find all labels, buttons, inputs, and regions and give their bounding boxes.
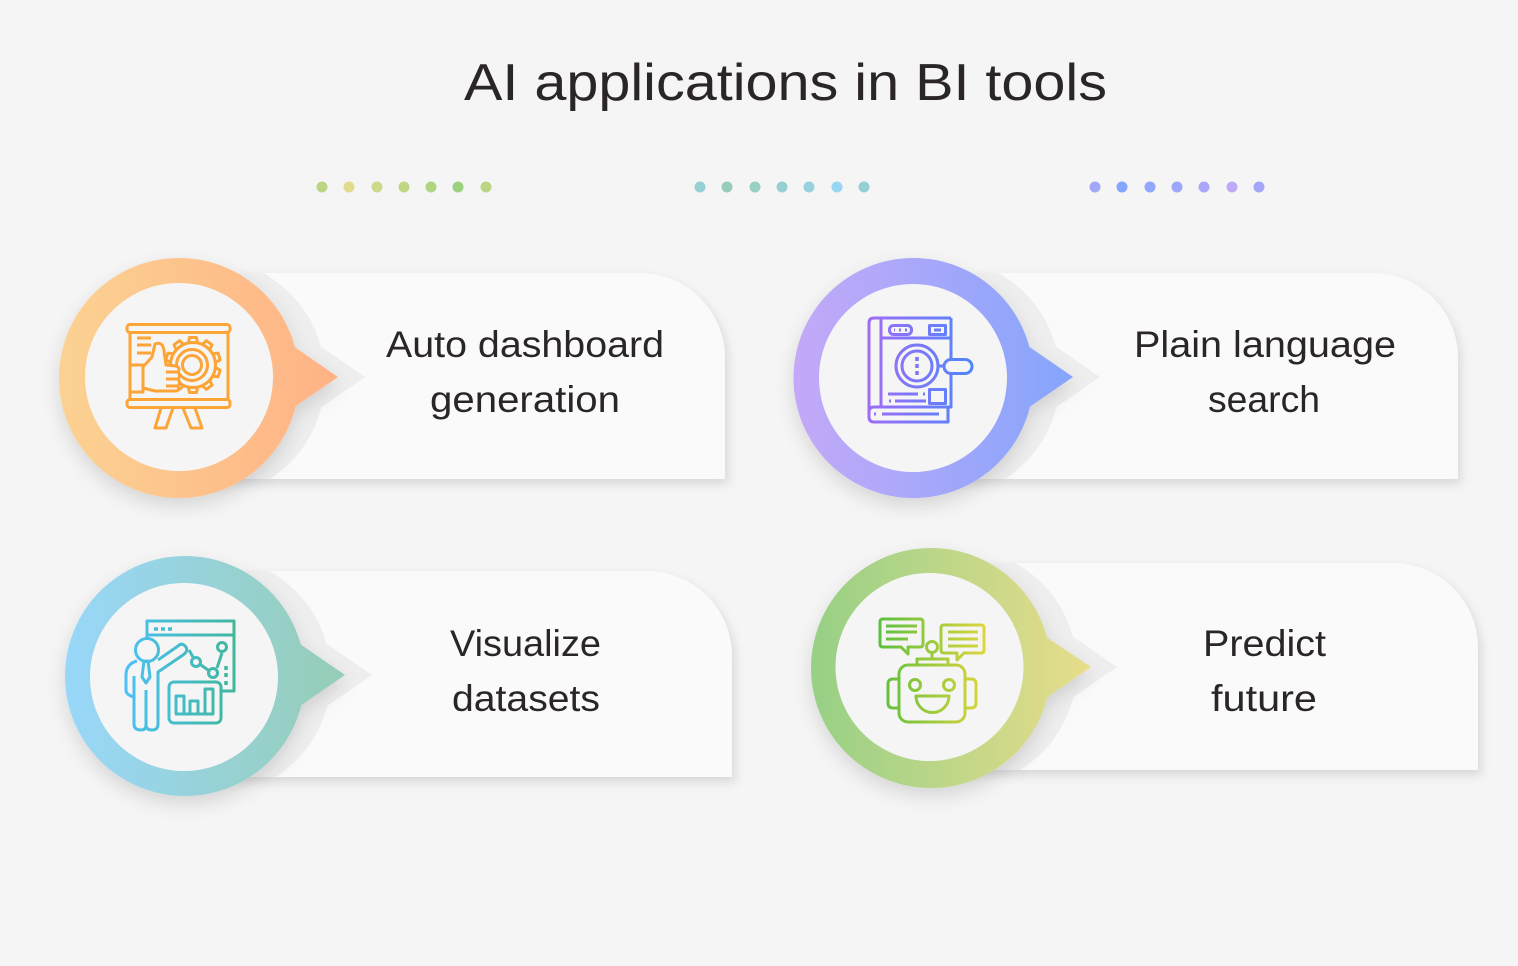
dotted divider: teal <box>694 182 870 192</box>
label <box>386 324 664 420</box>
pin badge <box>65 556 345 796</box>
infographic canvas <box>54 62 1484 810</box>
badge centre <box>819 284 1007 472</box>
pin badge <box>811 548 1091 788</box>
label: Predict <box>1203 623 1327 664</box>
card background <box>935 273 1458 479</box>
panel: predict future <box>811 548 1478 788</box>
icon: chatbot with speech bubbles <box>880 619 984 722</box>
label: datasets <box>452 678 600 719</box>
label: Visualize <box>450 623 601 664</box>
icon: presentation board with thumbs-up and gear <box>127 324 230 428</box>
label: Auto dashboard <box>386 324 664 365</box>
card background <box>205 571 732 777</box>
badge centre <box>85 283 273 471</box>
panel: auto dashboard generation <box>59 258 725 498</box>
label: search <box>1208 379 1320 420</box>
label <box>1134 324 1396 420</box>
label: generation <box>430 379 620 420</box>
card inner shade <box>244 571 372 777</box>
label <box>450 623 601 719</box>
label <box>1203 623 1327 719</box>
badge centre <box>90 583 278 771</box>
card background <box>950 563 1478 770</box>
card inner shade <box>238 273 364 479</box>
card inner shade <box>972 273 1100 479</box>
dotted divider: green <box>316 182 492 192</box>
title: AI applications in BI tools <box>464 54 1107 112</box>
panel: plain language search <box>794 258 1458 498</box>
icon: presenter with charts <box>126 621 234 730</box>
pin badge <box>59 258 338 498</box>
dotted divider: purple <box>1090 182 1264 192</box>
card background <box>200 273 725 479</box>
card inner shade <box>990 563 1116 770</box>
icon: book with magnifier <box>869 318 972 422</box>
pin badge <box>794 258 1073 498</box>
label: future <box>1211 678 1317 719</box>
label: Plain language <box>1134 324 1396 365</box>
panel: visualize datasets <box>65 556 732 796</box>
badge centre <box>836 573 1024 761</box>
